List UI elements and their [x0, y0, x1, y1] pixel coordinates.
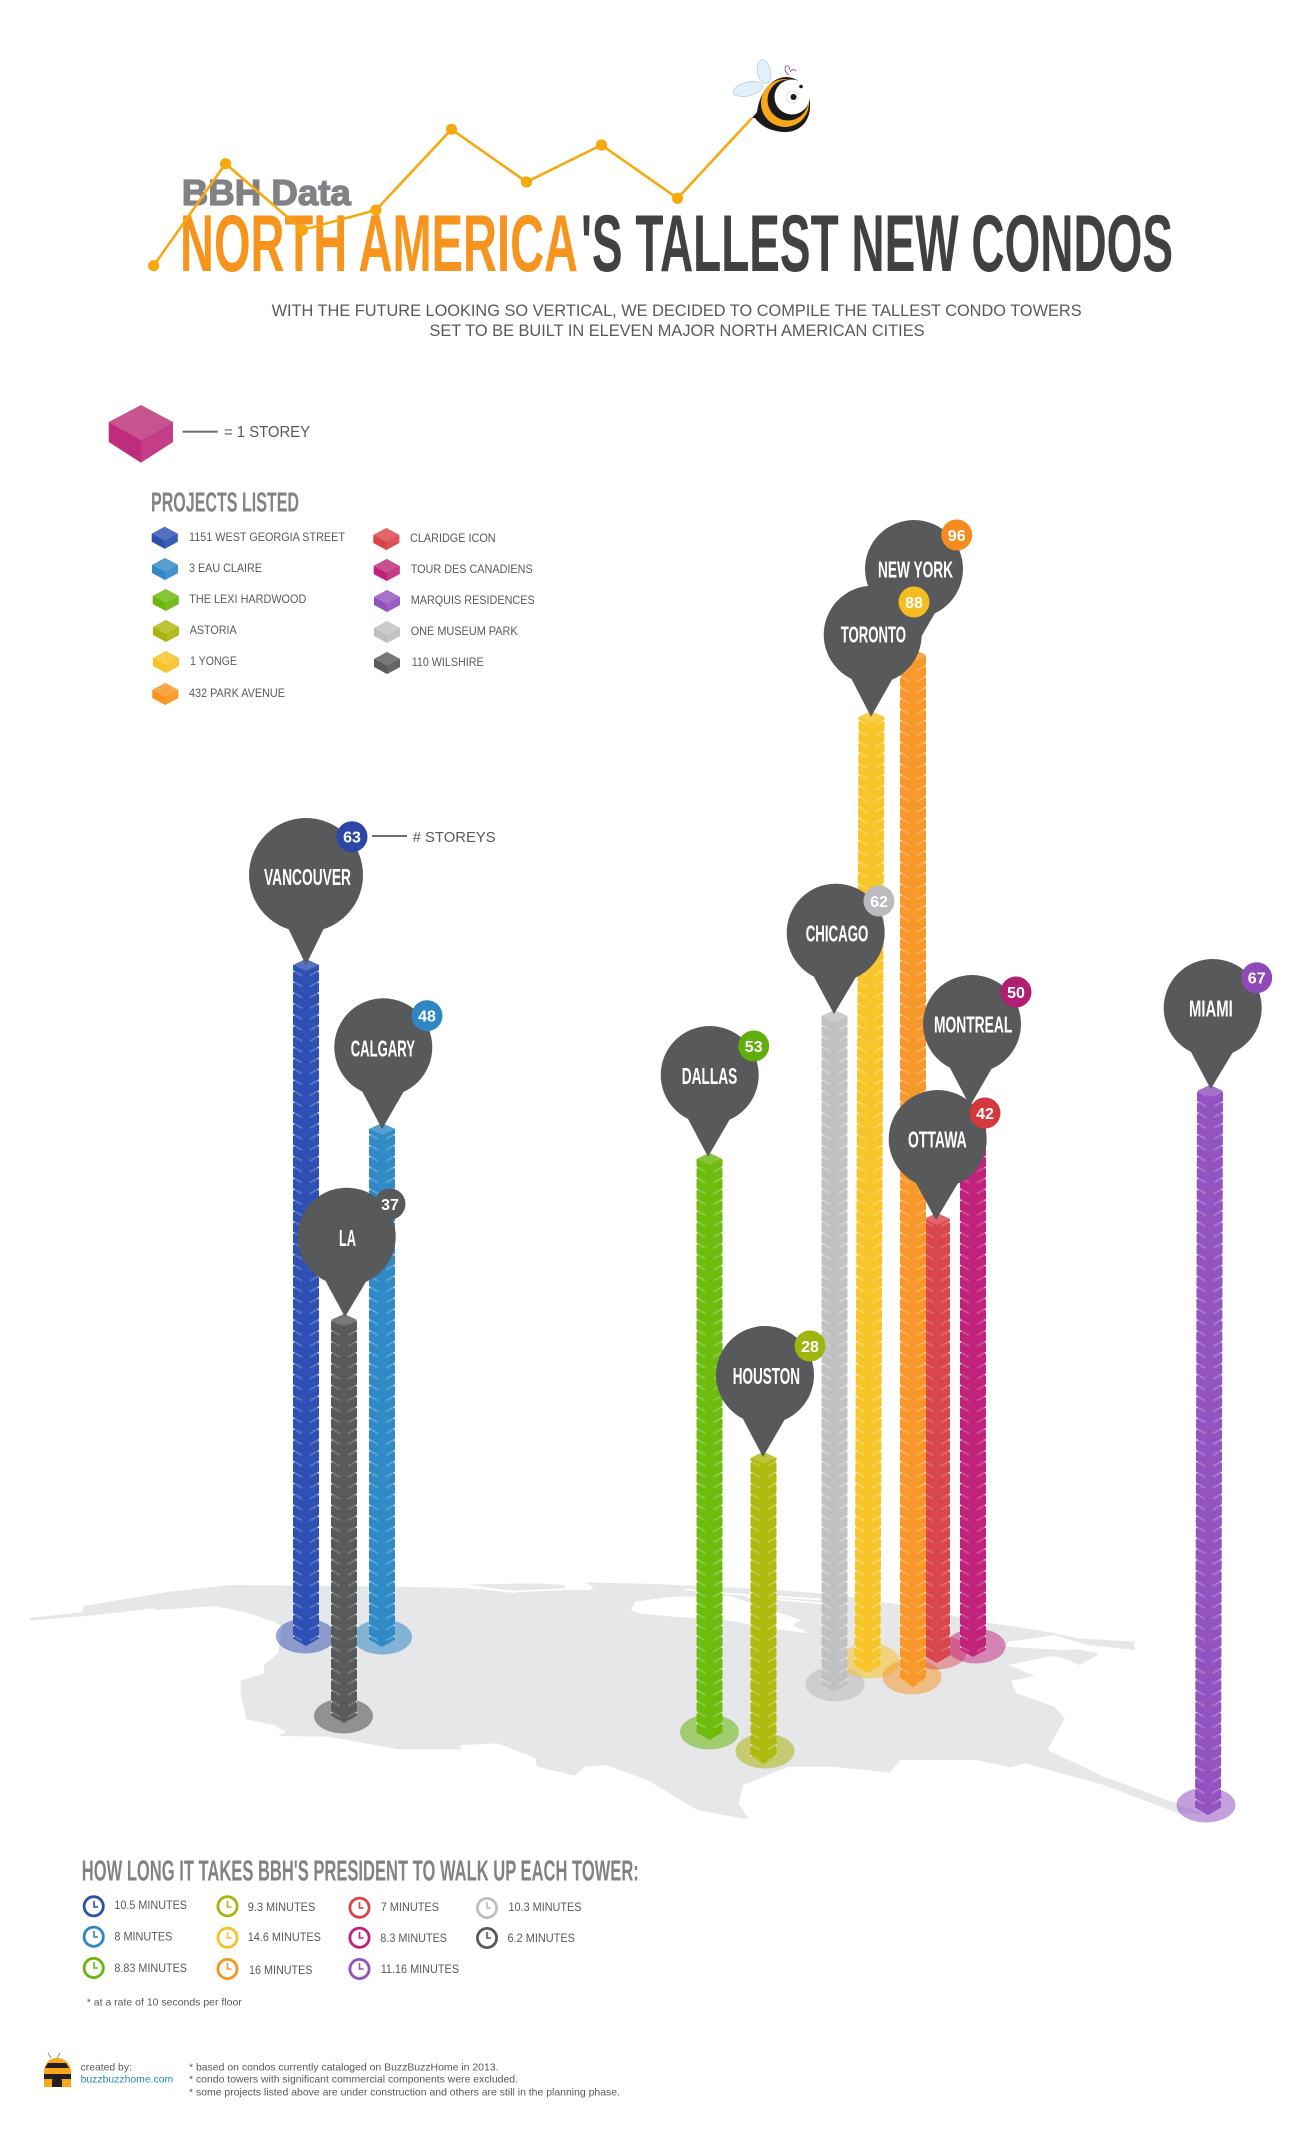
heading: projects listed: PROJECTS LISTED — [151, 487, 299, 518]
pin: Miami: 67 — [1248, 970, 1266, 988]
icon: bee — [732, 59, 810, 132]
walk-up time list with clocks: 16 MINUTES — [249, 1965, 313, 1977]
pin: Toronto: TORONTO — [841, 622, 906, 648]
footnote: walking rate: * at a rate of 10 seconds per floor — [87, 1996, 242, 2008]
pin: LA — [298, 1188, 406, 1317]
pin: LA: 37 — [381, 1197, 399, 1214]
pin: Montreal — [923, 975, 1032, 1106]
pin: Dallas — [661, 1026, 769, 1157]
walk-up time list with clocks — [84, 1897, 582, 1979]
pin: New York — [865, 520, 972, 651]
pin: Dallas: DALLAS — [682, 1063, 737, 1089]
legend: projects list: 110 WILSHIRE — [412, 655, 484, 669]
brand heading: BBH Data: BBH Data — [182, 172, 352, 213]
tower: Dallas The Lexi Hardwood — [696, 1153, 722, 1740]
walk-up time list with clocks: 8.83 MINUTES — [114, 1963, 187, 1975]
pin: Ottawa: 42 — [976, 1106, 994, 1123]
pin: Chicago: CHICAGO — [806, 921, 868, 947]
pin: Vancouver — [249, 818, 368, 965]
pin: Calgary: CALGARY — [351, 1036, 415, 1062]
walk-up time list with clocks: 11.16 MINUTES — [381, 1964, 459, 1976]
walk-up time list with clocks: 6.2 MINUTES — [508, 1933, 575, 1945]
legend: projects list — [152, 527, 535, 705]
legend: projects list: ONE MUSEUM PARK — [411, 624, 518, 638]
title: NORTH AMERICA — [180, 199, 578, 289]
pin: Toronto: 88 — [905, 595, 923, 612]
footnotes — [189, 2062, 620, 2098]
tower: Montreal Tour des Canadiens — [960, 1112, 986, 1657]
callout: number of storeys — [372, 829, 496, 846]
pin: Chicago: 62 — [870, 894, 888, 911]
footnotes: * based on condos currently cataloged on BuzzBuzzHome in 2013. — [189, 2062, 498, 2074]
footnotes: * some projects listed above are under construction and others are still in the planning phase. — [189, 2086, 620, 2098]
walk-up time list with clocks: 7 MINUTES — [381, 1902, 439, 1914]
legend: projects list: ASTORIA — [190, 623, 237, 637]
pin: Calgary — [334, 998, 442, 1129]
pin: Houston: HOUSTON — [733, 1363, 800, 1389]
map of North America — [30, 1582, 1204, 1819]
walk-up time list with clocks: 9.3 MINUTES — [248, 1902, 316, 1914]
legend: projects list: TOUR DES CANADIENS — [411, 562, 533, 576]
pin: Toronto — [824, 586, 930, 717]
tower: LA 110 Wilshire — [331, 1314, 357, 1723]
legend: projects list: 432 PARK AVENUE — [189, 686, 285, 700]
tower: Chicago One Museum Park — [822, 1010, 848, 1692]
pin: Houston: 28 — [801, 1339, 819, 1356]
pin: Montreal: 50 — [1007, 985, 1025, 1002]
credit — [81, 2062, 173, 2086]
pin: LA: LA — [339, 1225, 356, 1251]
tower: Ottawa Claridge Icon — [924, 1213, 950, 1663]
subtitle: WITH THE FUTURE LOOKING SO VERTICAL, WE DECIDED TO COMPILE THE TALLEST CONDO TOWERS — [272, 302, 1082, 320]
legend: projects list: 1 YONGE — [190, 654, 237, 668]
tower: Houston Astoria — [750, 1452, 776, 1764]
pin: Vancouver: VANCOUVER — [264, 864, 351, 890]
legend: projects list: 1151 WEST GEORGIA STREET — [189, 530, 346, 544]
pin: Ottawa: OTTAWA — [908, 1127, 967, 1153]
pin: Chicago — [787, 884, 894, 1014]
tower: Toronto 1 Yonge — [854, 711, 885, 1673]
footnotes: * condo towers with significant commercial components were excluded. — [189, 2074, 518, 2086]
callout: number of storeys: # STOREYS — [413, 829, 496, 846]
walk-up time list with clocks: 10.3 MINUTES — [508, 1902, 582, 1914]
walk-up time list with clocks: 8.3 MINUTES — [380, 1933, 447, 1945]
pin: Houston — [716, 1326, 826, 1457]
pin: Miami: MIAMI — [1189, 996, 1233, 1022]
line chart behind title — [148, 118, 752, 271]
pin: Montreal: MONTREAL — [934, 1012, 1012, 1038]
pin: Calgary: 48 — [418, 1008, 436, 1026]
pin: New York: NEW YORK — [878, 557, 953, 583]
pin: Miami — [1164, 959, 1272, 1089]
tower: Vancouver 1151 West Georgia Street — [293, 959, 319, 1646]
pin: Dallas: 53 — [745, 1039, 763, 1056]
heading: walk-up times: HOW LONG IT TAKES BBH'S PRESIDENT TO WALK UP EACH TOWER: — [82, 1856, 639, 1888]
walk-up time list with clocks: 8 MINUTES — [114, 1932, 173, 1944]
legend: one storey key — [109, 405, 310, 463]
pin: Ottawa — [889, 1090, 1000, 1220]
pin: Vancouver: 63 — [343, 830, 361, 846]
tower: New York 432 Park Avenue — [900, 649, 926, 1687]
legend: projects list: CLARIDGE ICON — [410, 531, 496, 545]
walk-up time list with clocks: 14.6 MINUTES — [248, 1932, 321, 1944]
legend: one storey key: = 1 STOREY — [224, 424, 310, 441]
pin: New York: 96 — [948, 528, 966, 545]
subtitle — [272, 302, 1082, 340]
credit: buzzbuzzhome.com — [81, 2074, 173, 2086]
subtitle: SET TO BE BUILT IN ELEVEN MAJOR NORTH AMERICAN CITIES — [430, 322, 924, 340]
tower: Calgary 3 Eau Claire — [369, 1123, 395, 1647]
tower base shadows — [276, 1618, 1235, 1822]
tower: Miami Marquis Residences — [1195, 1085, 1223, 1815]
icon: beehive — [44, 2053, 71, 2087]
legend: projects list: 3 EAU CLAIRE — [189, 561, 262, 575]
legend: projects list: MARQUIS RESIDENCES — [411, 593, 535, 607]
credit: created by: — [81, 2062, 132, 2074]
legend: projects list: THE LEXI HARDWOOD — [189, 592, 307, 606]
walk-up time list with clocks: 10.5 MINUTES — [114, 1900, 187, 1912]
